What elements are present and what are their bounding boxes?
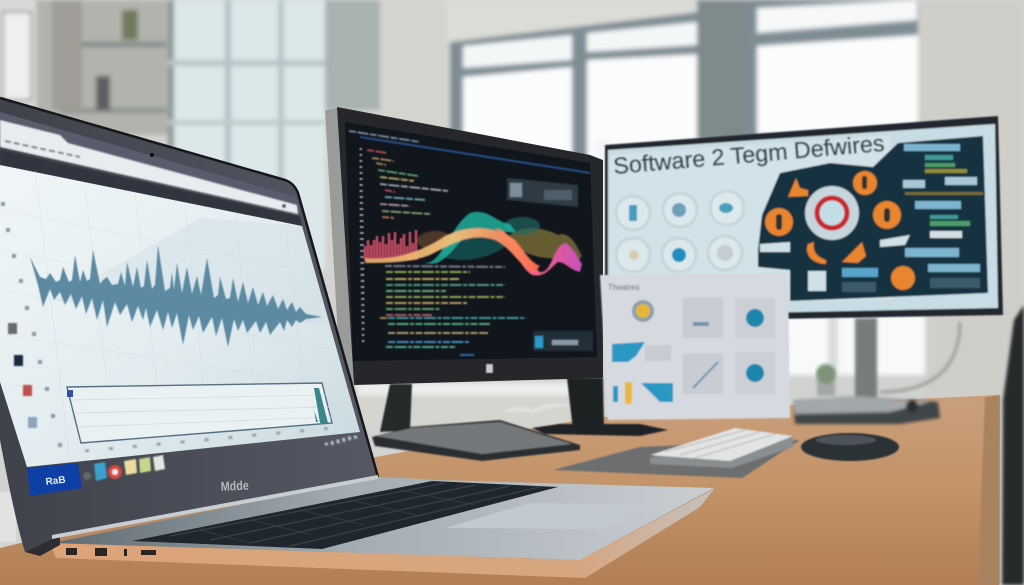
bar chart on center monitor xyxy=(365,230,416,260)
laptop base copper edge xyxy=(50,489,714,578)
taskbar icons xyxy=(83,455,165,481)
lower chart box xyxy=(67,383,332,443)
line numbers xyxy=(360,148,364,346)
desktop icons xyxy=(8,323,37,428)
laptop screen xyxy=(0,165,360,467)
laptop deck xyxy=(52,477,714,560)
right monitor xyxy=(605,116,1003,322)
code lines upper xyxy=(349,131,590,218)
dark diagram panel xyxy=(758,136,988,301)
trackpad xyxy=(445,503,655,529)
screen grid xyxy=(0,170,352,462)
screen taskbar icons xyxy=(355,354,384,358)
laptop xyxy=(0,98,714,578)
start button xyxy=(27,463,82,496)
central gear and red ring xyxy=(805,186,859,240)
card heading: Theatres xyxy=(608,283,640,292)
desk card with icons xyxy=(600,273,790,420)
card icons xyxy=(612,298,775,404)
x axis labels xyxy=(85,428,332,451)
desk mat xyxy=(553,440,800,478)
hinge shadow xyxy=(25,535,60,556)
side panel bars xyxy=(760,144,983,292)
webcam xyxy=(150,153,154,157)
table top xyxy=(0,395,1000,585)
colourful wave ribbons xyxy=(365,212,582,276)
monitor heading: Software 2 Tegm Defwires xyxy=(612,130,885,179)
waveform chart xyxy=(30,245,322,347)
axis labels on chart xyxy=(1,202,62,447)
right monitor stand xyxy=(793,318,960,424)
keyboard xyxy=(650,428,793,468)
dark glyphs inside orange icons xyxy=(776,176,890,230)
table right edge xyxy=(978,395,1000,585)
laptop brand: Mdde xyxy=(220,478,249,494)
mouse xyxy=(801,433,899,461)
white object at left edge xyxy=(0,492,16,542)
row of circular icons xyxy=(616,191,744,272)
keyboard keys xyxy=(132,481,558,549)
system tray xyxy=(325,436,358,445)
orange icons xyxy=(765,171,915,290)
browser bar xyxy=(0,120,302,227)
glasses xyxy=(505,404,567,412)
screen sheen xyxy=(55,218,330,325)
laptop lid xyxy=(0,98,378,552)
potted plant xyxy=(816,364,836,396)
laptop ports xyxy=(66,548,156,556)
start button: RaB xyxy=(45,475,66,488)
center monitor stand xyxy=(372,378,668,461)
center monitor xyxy=(325,107,603,385)
editor inset panels xyxy=(460,178,593,356)
chair xyxy=(1002,305,1024,585)
code lines lower xyxy=(380,266,526,347)
